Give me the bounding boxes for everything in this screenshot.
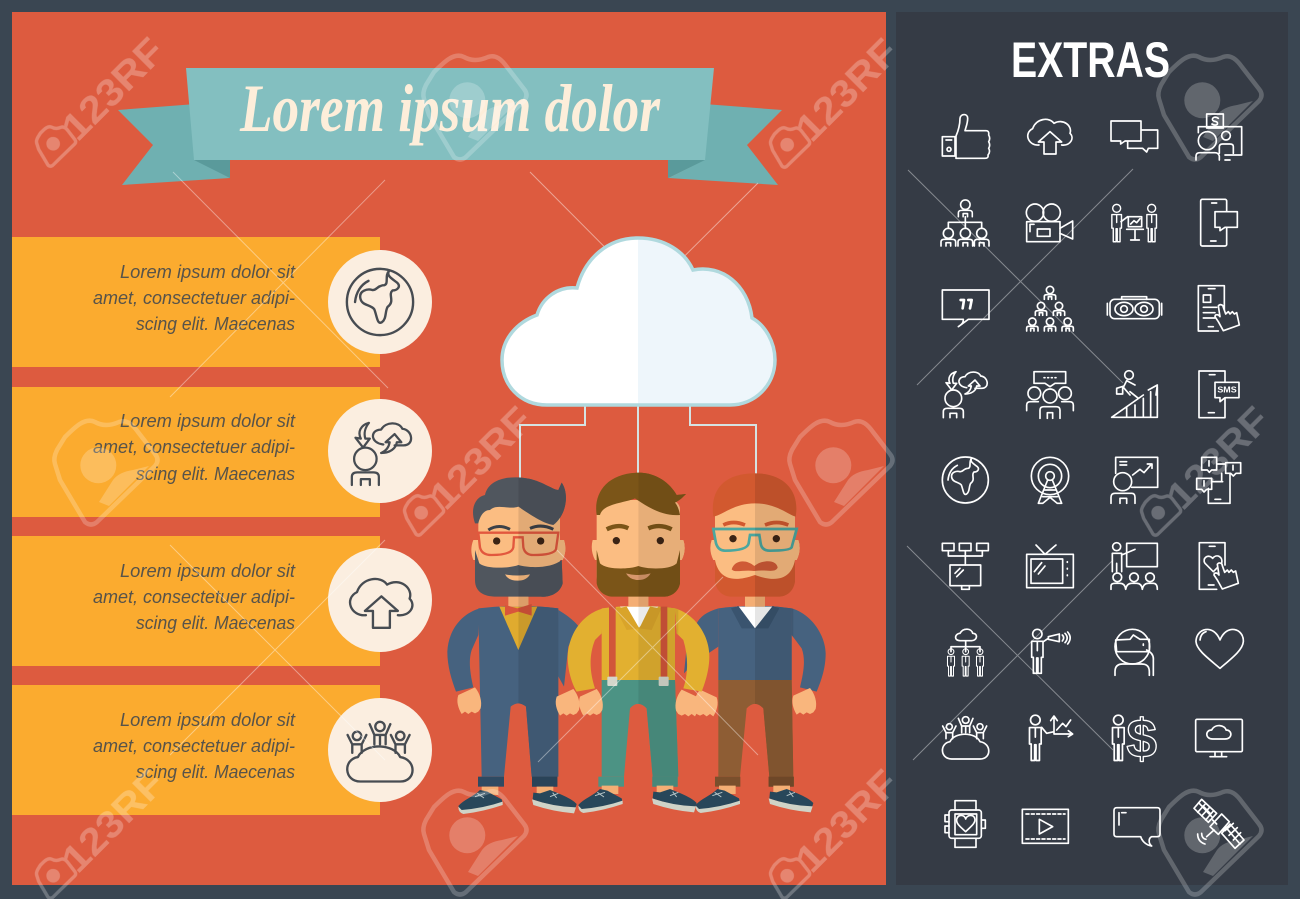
icon: cloud team	[947, 629, 984, 676]
man: left with red glasses	[447, 477, 580, 814]
icon: network monitor	[942, 543, 988, 589]
icon: heart	[1196, 629, 1243, 668]
icon: hierarchy	[941, 200, 989, 246]
icon: cloud upload	[350, 579, 412, 628]
icon: person with cloud	[352, 423, 411, 485]
icon: finance meeting	[1196, 114, 1242, 160]
icon: man with dollar	[1112, 707, 1157, 769]
icon: cloud upload	[1028, 119, 1072, 154]
panel: list item 1	[12, 237, 432, 367]
man: right with teal glasses	[684, 473, 826, 813]
diagonal lines behind the cloud	[530, 172, 758, 400]
icon: business meeting	[1112, 204, 1156, 242]
panel: list item 3: scing elit. Maecenas	[136, 612, 295, 633]
man: centre with suspenders	[568, 473, 709, 813]
title: Lorem ipsum dolor	[239, 70, 660, 146]
cloud	[502, 238, 775, 405]
banner ribbon	[118, 68, 782, 185]
panel: list item 1: amet, consectetuer adipi-	[93, 287, 295, 308]
icon: vr goggles	[1107, 297, 1162, 319]
icon: vr headset person	[1115, 629, 1153, 675]
panel: list item 4: scing elit. Maecenas	[136, 761, 295, 782]
icon: phone tap	[1198, 286, 1239, 331]
icon: phone message	[1201, 199, 1237, 246]
icon: phone sms	[1199, 371, 1239, 418]
icon: phone sms: SMS	[1217, 386, 1237, 395]
icon: television	[1027, 545, 1073, 588]
icon: person cloud	[943, 372, 987, 418]
panel: main red infographic	[12, 12, 886, 885]
icon: quote bubble	[942, 290, 989, 327]
icon: globe	[347, 269, 413, 335]
icon: man with megaphone	[1032, 629, 1070, 673]
icon: cloud with people	[347, 722, 413, 781]
panel: list item 4: Lorem ipsum dolor sit	[120, 709, 296, 730]
icon: presentation audience	[1111, 543, 1157, 589]
illustration: three bearded men	[447, 473, 826, 814]
icon grid rows 5-9	[942, 457, 1244, 848]
connector lines	[520, 405, 756, 478]
panel: list item 2: amet, consectetuer adipi-	[93, 436, 295, 457]
icon: people pyramid	[1027, 286, 1073, 331]
icon: presenter chart	[1111, 457, 1158, 503]
panel: list item 2: scing elit. Maecenas	[136, 463, 295, 484]
panel: list item 3: Lorem ipsum dolor sit	[120, 560, 296, 581]
icon: monitor cloud	[1196, 719, 1242, 757]
panel: list item 1: scing elit. Maecenas	[136, 313, 295, 334]
panel: extras dark sidebar	[896, 12, 1288, 885]
icon: thumbs up	[942, 115, 990, 158]
icon: video player	[1022, 809, 1068, 843]
diagonal watermark lines	[170, 169, 1133, 762]
icon: globe	[942, 457, 988, 503]
panel: list item 2	[12, 387, 432, 517]
icon: chat bubbles	[1111, 121, 1158, 152]
panel: list item 4: amet, consectetuer adipi-	[93, 735, 295, 756]
panel: list item 1: Lorem ipsum dolor sit	[120, 261, 296, 282]
icon: runner growth chart	[1112, 371, 1157, 417]
heading: EXTRAS: EXTRAS	[1011, 32, 1170, 88]
icon: phone notifications	[1197, 457, 1241, 503]
icon: phone heart tap	[1199, 543, 1238, 589]
icon: speech bubble	[1114, 808, 1160, 846]
icon: satellite	[1194, 799, 1244, 848]
panel: list item 3	[12, 536, 432, 666]
icon: smart watch	[945, 801, 985, 847]
icon: man with chart	[1029, 715, 1073, 761]
icon: cloud people	[942, 717, 989, 759]
panel: list item 3: amet, consectetuer adipi-	[93, 586, 295, 607]
icon grid rows 1-4	[941, 114, 1242, 418]
icon: radio tower	[1031, 457, 1069, 503]
icon: film camera	[1026, 204, 1073, 242]
icon: man with dollar: $	[1126, 707, 1157, 769]
panel: list item 2: Lorem ipsum dolor sit	[120, 410, 296, 431]
icon: team with sign	[1027, 372, 1073, 418]
panel: list item 4	[12, 685, 432, 815]
